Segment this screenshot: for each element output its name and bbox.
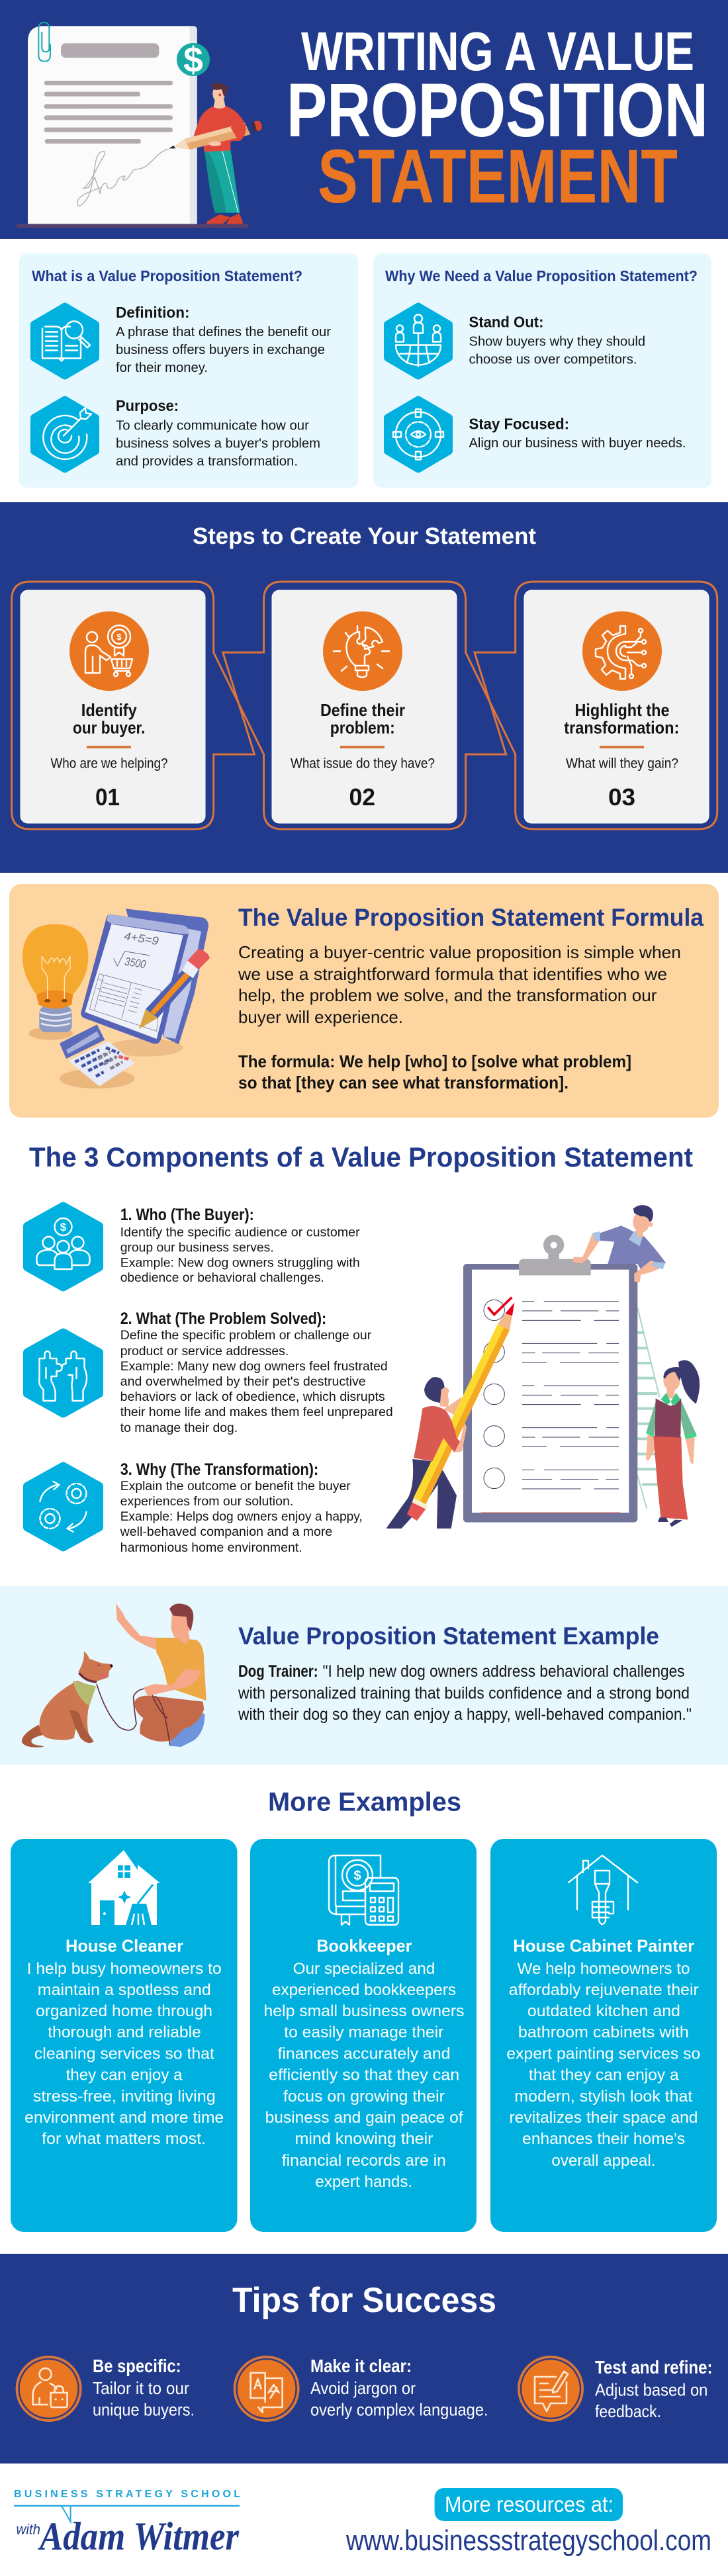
heading: problem: xyxy=(330,717,395,737)
question: What will they gain? xyxy=(566,756,678,772)
panel: value proposition statement example xyxy=(0,1586,728,1765)
title and text: affordably rejuvenate their xyxy=(509,1981,699,1999)
icon: gears with arrows xyxy=(28,1466,99,1547)
title and text: outdated kitchen and xyxy=(527,2002,680,2020)
text: Adjust based on xyxy=(595,2380,707,2400)
number: 01 xyxy=(95,783,120,811)
icon: ledger and calculator: $ xyxy=(353,1869,361,1883)
panel: steps to create your statement xyxy=(0,502,728,873)
heading: Value Proposition Statement Example xyxy=(238,1622,659,1650)
icon: lightbulb with puzzle xyxy=(323,611,402,691)
heading: Identify xyxy=(81,700,137,720)
title and text: that they can enjoy a xyxy=(529,2066,679,2084)
text: what: and overwhelmed by their pet's destructive xyxy=(120,1374,366,1389)
step 2 card xyxy=(272,590,457,823)
text: why: well-behaved companion and a more xyxy=(120,1525,332,1539)
title and text: Bookkeeper xyxy=(316,1935,412,1955)
text: purpose: and provides a transformation. xyxy=(116,453,298,468)
panel: tips for success xyxy=(0,2254,728,2464)
title and text: stress-free, inviting living xyxy=(33,2088,216,2106)
text: why xyxy=(120,1460,363,1555)
title and text: organized home through xyxy=(36,2002,212,2020)
text: why: experiences from our solution. xyxy=(120,1494,293,1509)
text: who xyxy=(120,1206,360,1285)
text: why: Explain the outcome or benefit the buyer xyxy=(120,1479,351,1493)
title and text: enhances their home's xyxy=(522,2130,685,2148)
title xyxy=(287,21,708,219)
description: help, the problem we solve, and the transformation our xyxy=(238,985,657,1005)
text: stand out: Stand Out: xyxy=(469,313,544,330)
card: house cleaner xyxy=(11,1839,237,2232)
icon: house with paint brush xyxy=(569,1855,637,1924)
title and text: revitalizes their space and xyxy=(510,2109,698,2127)
text: Avoid jargon or xyxy=(310,2378,416,2398)
heading: Tips for Success xyxy=(232,2281,496,2320)
panel: formula xyxy=(9,884,719,1118)
text: why: harmonious home environment. xyxy=(120,1540,302,1555)
text: who: Example: New dog owners struggling with xyxy=(120,1255,360,1270)
title and text: for what matters most. xyxy=(42,2130,206,2148)
text xyxy=(93,2356,195,2420)
card: bookkeeper xyxy=(250,1839,477,2232)
text: who: 1. Who (The Buyer): xyxy=(120,1206,254,1224)
heading: Define their xyxy=(320,700,405,720)
text: stand out xyxy=(469,313,645,367)
resources callout xyxy=(345,2488,711,2557)
text: overly complex language. xyxy=(310,2400,488,2420)
description xyxy=(238,942,681,1027)
card: house cabinet painter xyxy=(490,1839,717,2232)
illustration: man training dog xyxy=(22,1603,206,1748)
formula xyxy=(238,1051,631,1092)
section: three components xyxy=(28,1141,700,1555)
title and text: I help busy homeowners to xyxy=(27,1960,222,1978)
text: definition: for their money. xyxy=(116,360,208,375)
resources callout: More resources at: xyxy=(445,2492,614,2516)
text: purpose: Purpose: xyxy=(116,397,179,414)
text: who: group our business serves. xyxy=(120,1240,274,1255)
title and text: business and gain peace of xyxy=(265,2109,463,2127)
heading: Highlight the xyxy=(574,700,670,720)
text: definition xyxy=(116,304,331,375)
description: we use a straightforward formula that identifies who we xyxy=(238,964,667,984)
icon: gear with circuit xyxy=(582,611,662,691)
title and text: thorough and reliable xyxy=(48,2023,201,2041)
icon: person with bag xyxy=(16,2356,82,2422)
formula: so that [they can see what transformation]. xyxy=(238,1073,569,1092)
title and text: financial records are in xyxy=(282,2152,446,2170)
illustration: lightbulb, document, calculator: 3500 xyxy=(124,955,147,971)
title and text: cleaning services so that xyxy=(34,2045,214,2063)
text: what: behaviors or lack of obedience, which disrupts xyxy=(120,1390,385,1404)
footer logo: business strategy school with Adam Witmer: BUSINESS STRATEGY SCHOOL xyxy=(14,2489,240,2500)
text: what: product or service addresses. xyxy=(120,1344,289,1358)
title and text: Our specialized and xyxy=(293,1960,435,1978)
text: what: 2. What (The Problem Solved): xyxy=(120,1310,326,1328)
text: purpose xyxy=(116,397,320,468)
heading: transformation: xyxy=(564,717,679,737)
panel: what is a value proposition statement xyxy=(19,253,358,488)
formula: The formula: We help [who] to [solve what problem] xyxy=(238,1051,631,1071)
icon: buyer with cart xyxy=(69,611,149,691)
step 3 card xyxy=(524,590,709,823)
text: what: their home life and makes them feel unprepared xyxy=(120,1405,393,1419)
icon: people and globe xyxy=(388,307,449,376)
icon: buyer with cart: $ xyxy=(116,632,122,642)
panel: why we need a value proposition statement xyxy=(373,253,711,488)
number: 02 xyxy=(349,783,375,811)
quote xyxy=(238,1662,692,1724)
title and text: modern, stylish look that xyxy=(514,2088,693,2106)
text: what: Define the specific problem or challenge our xyxy=(120,1328,372,1343)
icon: hands with puzzle pieces xyxy=(28,1333,99,1413)
icon: message with pen xyxy=(518,2356,584,2422)
title and text: experienced bookkeepers xyxy=(272,1981,456,1999)
title and text xyxy=(263,1935,465,2191)
tip: make it clear xyxy=(234,2356,488,2422)
title and text: to easily manage their xyxy=(284,2023,443,2041)
title and text: focus on growing their xyxy=(283,2088,445,2106)
icon: ledger and calculator xyxy=(329,1855,398,1925)
heading xyxy=(320,700,405,737)
title and text: help small business owners xyxy=(263,2002,465,2020)
title and text: finances accurately and xyxy=(278,2045,450,2063)
quote: with personalized training that builds confidence and a strong bond xyxy=(238,1684,690,1703)
heading: More Examples xyxy=(268,1788,461,1817)
section: more examples xyxy=(11,1788,717,2232)
title and text: House Cleaner xyxy=(66,1935,183,1955)
heading xyxy=(564,700,679,737)
footer logo: business strategy school with Adam Witmer xyxy=(14,2489,240,2558)
text: who: obedience or behavioral challenges. xyxy=(120,1270,324,1285)
icon: buyer group: $ xyxy=(60,1221,67,1233)
title and text: maintain a spotless and xyxy=(38,1981,211,1999)
icon: clean house xyxy=(88,1850,160,1925)
connected outline xyxy=(12,582,717,829)
text: what: to manage their dog. xyxy=(120,1421,238,1435)
title and text xyxy=(24,1935,224,2148)
text: unique buyers. xyxy=(93,2400,195,2420)
text: definition: A phrase that defines the benefit our xyxy=(116,324,331,339)
footer logo: business strategy school with Adam Witmer: with xyxy=(16,2521,40,2538)
text: definition: Definition: xyxy=(116,304,189,321)
step 1 card xyxy=(21,590,205,823)
heading: our buyer. xyxy=(73,717,145,737)
text: Be specific: xyxy=(93,2356,181,2376)
text: purpose: business solves a buyer's problem xyxy=(116,436,320,451)
text: what: Example: Many new dog owners feel frustrated xyxy=(120,1359,388,1374)
heading: The 3 Components of a Value Proposition Statement xyxy=(29,1141,693,1173)
title and text: expert painting services so xyxy=(506,2045,700,2063)
quote: with their dog so they can enjoy a happy, well-behaved companion." xyxy=(238,1705,692,1724)
description: Creating a buyer-centric value proposition is simple when xyxy=(238,942,681,962)
text: what xyxy=(120,1310,393,1435)
number: 03 xyxy=(608,783,635,811)
title and text xyxy=(506,1935,700,2170)
text: stay focused: Stay Focused: xyxy=(469,416,569,433)
icon: focus target with gear and eye xyxy=(388,400,449,468)
text: stand out: choose us over competitors. xyxy=(469,352,637,367)
text: who: Identify the specific audience or customer xyxy=(120,1225,360,1240)
illustration: clipboard checklist with people xyxy=(386,1205,700,1529)
tip: test and refine xyxy=(518,2356,712,2422)
description: buyer will experience. xyxy=(238,1007,403,1027)
icon: translate xyxy=(234,2356,300,2422)
illustration: signed document and man with pencil: $ xyxy=(183,40,203,79)
text: stay focused: Align our business with buyer needs. xyxy=(469,435,686,451)
text: purpose: To clearly communicate how our xyxy=(116,418,309,433)
question: What issue do they have? xyxy=(291,756,435,772)
quote: Dog Trainer: xyxy=(238,1662,318,1681)
text: feedback. xyxy=(595,2401,661,2421)
text xyxy=(595,2357,712,2421)
tip: be specific xyxy=(16,2356,195,2422)
text xyxy=(310,2356,488,2420)
header banner xyxy=(0,0,728,239)
heading: The Value Proposition Statement Formula xyxy=(238,904,704,931)
icon: target with arrow xyxy=(34,400,95,468)
text: stay focused xyxy=(469,416,686,451)
icon: buyer group xyxy=(28,1206,99,1287)
illustration: signed document and man with pencil xyxy=(17,22,262,228)
title and text: mind knowing their xyxy=(295,2130,433,2148)
text: why: 3. Why (The Transformation): xyxy=(120,1460,318,1479)
illustration: lightbulb, document, calculator xyxy=(23,909,210,1088)
text: Make it clear: xyxy=(310,2356,412,2376)
title and text: they can enjoy a xyxy=(66,2066,183,2084)
heading: Why We Need a Value Proposition Statement? xyxy=(385,267,698,285)
heading: Steps to Create Your Statement xyxy=(193,523,536,549)
title and text: expert hands. xyxy=(315,2173,412,2191)
heading: What is a Value Proposition Statement? xyxy=(32,267,302,285)
title and text: efficiently so that they can xyxy=(269,2066,459,2084)
footer logo: business strategy school with Adam Witmer: Adam Witmer xyxy=(37,2514,240,2558)
title and text: We help homeowners to xyxy=(518,1960,690,1978)
title and text: overall appeal. xyxy=(551,2152,655,2170)
text: definition: business offers buyers in exchange xyxy=(116,342,325,357)
text: why: Example: Helps dog owners enjoy a happy, xyxy=(120,1509,363,1524)
text: Test and refine: xyxy=(595,2357,712,2377)
title and text: House Cabinet Painter xyxy=(513,1935,694,1955)
text: Tailor it to our xyxy=(93,2378,189,2398)
title and text: bathroom cabinets with xyxy=(518,2023,689,2041)
quote: "I help new dog owners address behavioral challenges xyxy=(323,1662,684,1681)
heading xyxy=(73,700,145,737)
title and text: environment and more time xyxy=(24,2109,224,2127)
icon: book with magnifier xyxy=(34,307,95,376)
text: stand out: Show buyers why they should xyxy=(469,333,645,349)
question: Who are we helping? xyxy=(50,756,168,772)
illustration: lightbulb, document, calculator: 4+5=9 xyxy=(123,929,160,948)
